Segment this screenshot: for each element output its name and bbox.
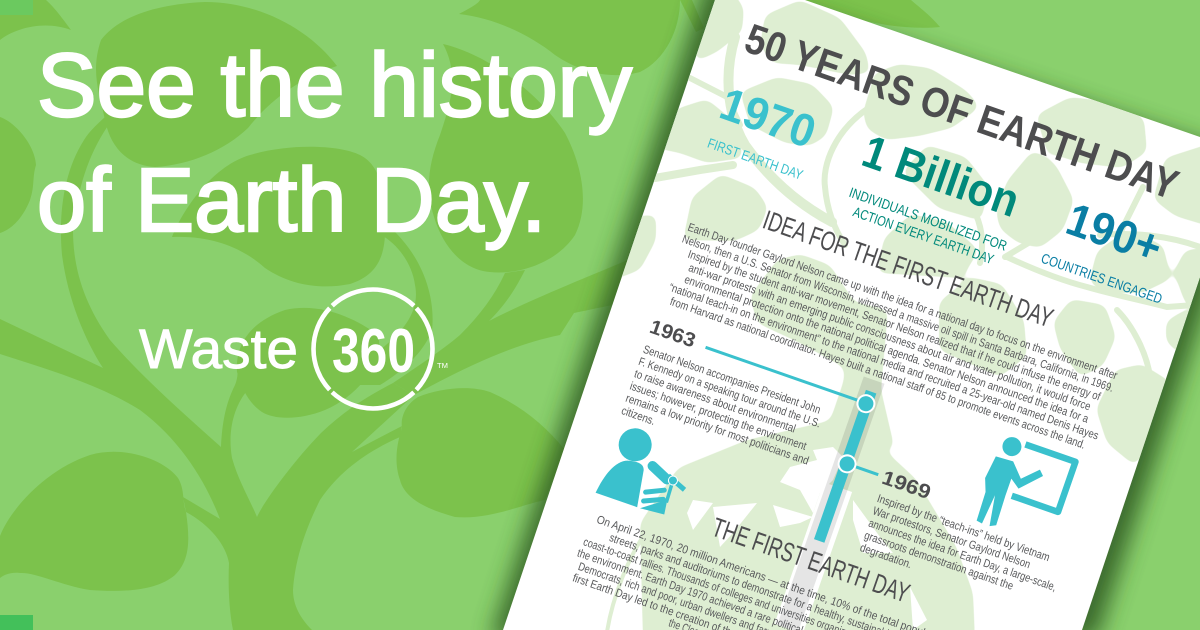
headline — [37, 36, 632, 251]
paragraph: 1969: announces the idea for Earth Day, a large-scale, — [867, 517, 1058, 594]
stat: 1970: FIRST EARTH DAY — [705, 135, 806, 183]
timeline — [705, 346, 884, 630]
paragraph: 1963 — [622, 346, 820, 465]
stat: 1 Billion — [849, 138, 1016, 264]
paragraph: 1963: remains a low priority for most politicians and — [624, 392, 810, 468]
stat: 1970 — [707, 90, 814, 179]
stat: 190+: COUNTRIES ENGAGED — [1039, 250, 1164, 307]
paragraph: idea: “national teach-in on the environment” to the national media and recruited a 25-year-old named Denis Hayes — [667, 281, 1100, 443]
paragraph: 1969: degradation. — [858, 541, 914, 571]
paragraph: 1963: F. Kennedy on a speaking tour around the U.S. — [637, 355, 822, 430]
headline: of Earth Day. — [37, 151, 546, 251]
heading: idea for the first earth day: IDEA FOR THE FIRST EARTH DAY — [759, 205, 1057, 333]
stat: 1 Billion: INDIVIDUALS MOBILIZED FOR — [847, 184, 1009, 254]
stat: 190+ — [1042, 206, 1162, 303]
logo: Waste360: 360 — [332, 317, 415, 386]
paragraph: idea: anti-war protests with an emerging public consciousness about air and water pollution, it would force — [687, 261, 1092, 413]
paragraph: 1969: War protestors, Senator Gaylord Nelson — [871, 504, 1032, 571]
globe white continents — [687, 447, 927, 630]
year label 1969: 1969 — [879, 467, 933, 504]
headline: See the history — [37, 36, 632, 136]
corner accent bottom — [0, 615, 33, 630]
paragraph: 1969: grassroots demonstration against the — [863, 529, 1015, 593]
poster paper — [503, 0, 1200, 630]
corner accent top — [0, 0, 33, 15]
stat: 1970: 1970 — [714, 77, 822, 158]
poster tree and globe watermark — [600, 0, 1200, 630]
poster content — [553, 14, 1200, 630]
paragraph: idea: Inspired by the student anti-war movement, Senator Nelson realized that if he could infuse the energy of — [686, 248, 1103, 404]
stat: 1 Billion: 1 Billion — [856, 125, 1026, 227]
paragraph: 1963: to raise awareness about environmental — [632, 367, 797, 435]
poster shadow — [490, 0, 1200, 630]
paragraph: 1963: Senator Nelson accompanies President John — [641, 343, 822, 417]
paragraph: idea: environmental protection onto the national political agenda. Senator Nelson announced the idea for a — [683, 273, 1091, 426]
poster tree branches — [607, 37, 1200, 630]
paragraph: 1963: citizens. — [620, 404, 657, 428]
year label 1963: 1963 — [647, 316, 698, 352]
tree silhouette background — [0, 0, 940, 630]
stat: 1 Billion: ACTION EVERY EARTH DAY — [851, 203, 997, 267]
paragraph: idea: from Harvard as national coordinator. Hayes built a national staff of 85 to promote events across the land. — [668, 295, 1087, 452]
stat: 190+: 190+ — [1060, 192, 1169, 273]
logo: Waste360 — [139, 290, 448, 408]
icon: speaker at podium — [596, 428, 686, 514]
paragraph: 1969: Inspired by the “teach-ins” held by Vietnam — [875, 492, 1051, 564]
logo: Waste360: Waste — [139, 317, 298, 380]
icon: presenter at board — [976, 437, 1079, 526]
logo: Waste360: TM — [437, 363, 448, 370]
paragraph: 1963: issues; however, protecting the environment — [628, 380, 809, 453]
